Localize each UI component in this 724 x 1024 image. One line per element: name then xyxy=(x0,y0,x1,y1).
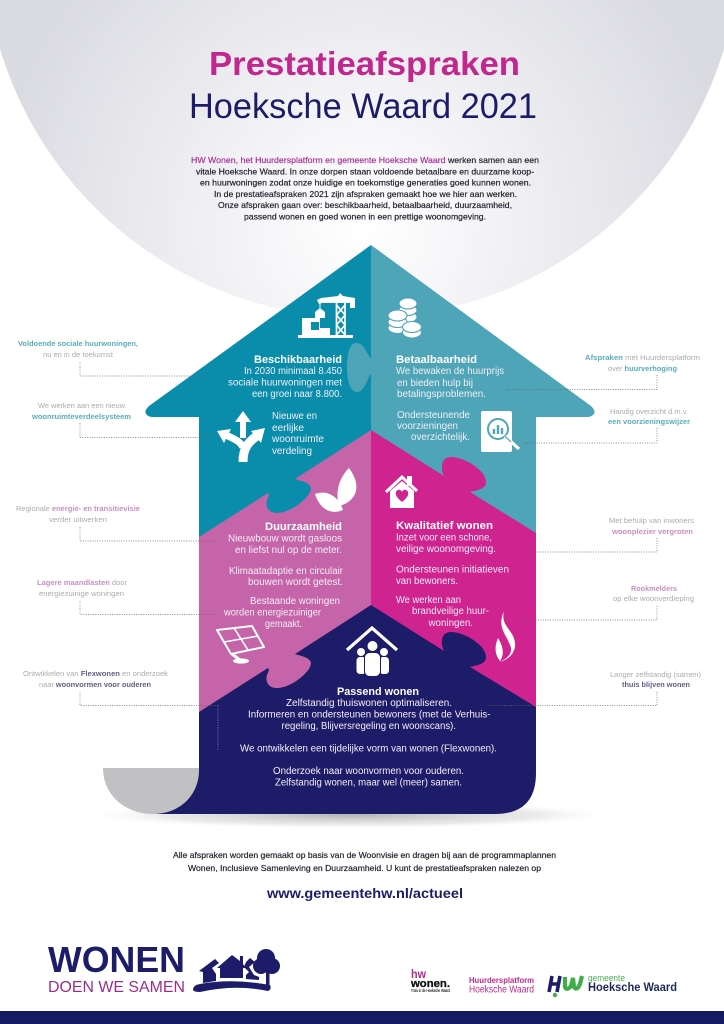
text: Betaalbaarheid: betalingsproblemen. xyxy=(397,389,486,400)
callout: woonruimteverdeelsysteem: woonruimteverdeelsysteem xyxy=(31,412,131,421)
icon: family under roof xyxy=(347,628,397,676)
text: voorzieningen: overzichtelijk. xyxy=(411,432,470,443)
logo: Wonen doen we samen: WONEN xyxy=(48,939,185,980)
text: Kwalitatief wonen: woningen. xyxy=(428,618,473,629)
icon: document with magnifier xyxy=(481,411,519,452)
text: Betaalbaarheid xyxy=(396,366,504,400)
title: Prestatieafspraken xyxy=(209,45,520,82)
text: Kwalitatief wonen: brandveilige huur- xyxy=(412,606,489,617)
text: Betaalbaarheid: en bieden hulp bij xyxy=(397,378,473,389)
callout: Flexwonen xyxy=(23,669,218,750)
heading: Betaalbaarheid: Betaalbaarheid xyxy=(396,354,477,366)
text: Passend wonen: Zelfstandig wonen, maar wel (meer) samen. xyxy=(275,778,462,789)
callout: Flexwonen: naar woonvormen voor ouderen xyxy=(39,680,151,689)
heading: Kwalitatief wonen: Kwalitatief wonen xyxy=(396,520,493,532)
footer bar xyxy=(0,1011,724,1024)
callout: woonplezier: Met behulp van inwoners xyxy=(609,516,694,525)
text: Passend wonen: Informeren en ondersteunen bewoners (met de Verhuis- xyxy=(248,710,490,721)
logo: Huurdersplatform: Hoeksche Waard xyxy=(469,984,534,996)
paper curl xyxy=(103,768,199,814)
text: Duurzaamheid: worden energiezuiniger xyxy=(223,608,322,619)
callout: huurverhoging xyxy=(507,353,700,390)
text: Kwalitatief wonen: Ondersteunen initiatieven xyxy=(396,565,509,576)
intro text block: en huurwoningen zodat onze huidige en toekomstige generaties goed kunnen wonen. xyxy=(200,178,531,188)
callout: thuis blijven wonen: Langer zelfstandig (samen) xyxy=(610,670,701,679)
callout: voorzieningswijzer xyxy=(524,407,690,443)
house shadow xyxy=(80,801,620,829)
callout: sociale huurwoningen: nu en in de toekomst xyxy=(43,350,113,359)
icon: arrows xyxy=(217,411,265,462)
intro text block: In de prestatieafspraken 2021 zijn afspraken gemaakt hoe we hier aan werken. xyxy=(214,189,517,199)
panel: Kwalitatief wonen xyxy=(371,430,536,730)
panel: Passend wonen xyxy=(153,605,536,814)
callout: huurverhoging: Afspraken met Huurdersplatform xyxy=(585,353,700,362)
text: Passend wonen xyxy=(240,698,497,789)
heading: Beschikbaarheid: Beschikbaarheid xyxy=(254,354,342,366)
text: Duurzaamheid: gemaakt. xyxy=(265,619,302,630)
intro text block xyxy=(191,155,539,222)
logo: Wonen doen we samen: DOEN WE SAMEN xyxy=(48,979,185,996)
panel: Beschikbaarheid xyxy=(145,245,371,545)
logo: Huurdersplatform: Huurdersplatform xyxy=(469,975,534,985)
intro text block: Onze afspraken gaan over: beschikbaarheid, betaalbaarheid, duurzaamheid, xyxy=(218,200,512,210)
icon: house with heart xyxy=(386,476,417,508)
text: Beschikbaarheid: een groei naar 8.800. xyxy=(252,389,342,400)
text: woonruimte verdeling xyxy=(271,411,324,457)
logo: HW Wonen: hw xyxy=(411,967,427,981)
text: Duurzaamheid: en liefst nul op de meter. xyxy=(235,545,342,556)
text: Beschikbaarheid xyxy=(228,366,342,400)
callout: woonruimteverdeelsysteem xyxy=(31,401,213,438)
text: voorzieningen: Ondersteunende xyxy=(397,410,470,421)
icon: coins xyxy=(388,298,422,338)
callout: woonplezier xyxy=(520,516,694,552)
title: Hoeksche Waard 2021 xyxy=(189,87,537,126)
icon: leaves xyxy=(315,468,356,512)
callout: energie- en transitievisie: verder uitwerken xyxy=(49,515,107,524)
closing text xyxy=(173,850,556,873)
intro text block: vitale Hoeksche Waard. In onze dorpen staan voldoende betaalbare en duurzame koop- xyxy=(196,166,534,176)
icon: solar panel xyxy=(217,626,264,664)
background: grey circle xyxy=(0,0,724,318)
logo: HW Wonen xyxy=(410,967,450,993)
text: Duurzaamheid: Bestaande woningen xyxy=(250,596,340,607)
text: voorzieningen xyxy=(397,410,470,443)
text: Passend wonen: We ontwikkelen een tijdelijke vorm van wonen (Flexwonen). xyxy=(240,744,497,755)
callout: lagere maandlasten xyxy=(37,578,214,614)
logo: HW Wonen: Trots in de Hoeksche Waard xyxy=(411,988,450,993)
callout: rookmelders: Rookmelders xyxy=(631,584,677,593)
logo: gemeente Hoeksche Waard: Hoeksche Waard xyxy=(588,980,677,994)
logo: Wonen doen we samen xyxy=(48,939,280,996)
heading: Passend wonen: Passend wonen xyxy=(337,686,419,698)
callout: woonplezier: woonplezier vergroten xyxy=(611,527,693,536)
panel: Duurzaamheid xyxy=(199,430,371,730)
callout: Flexwonen: Ontwikkelen van Flexwonen en onderzoek xyxy=(23,669,168,678)
callout: rookmelders: op elke woonverdieping xyxy=(613,594,694,603)
text: Duurzaamheid: Klimaatadaptie en circulair xyxy=(229,566,344,577)
callout: thuis blijven wonen: thuis blijven wonen xyxy=(622,680,690,689)
closing text: Wonen, Inclusieve Samenleving en Duurzaamheid. U kunt de prestatieafspraken nalezen op xyxy=(188,863,541,873)
text: Duurzaamheid: Nieuwbouw wordt gasloos xyxy=(228,534,342,545)
logo: HW Wonen: wonen. xyxy=(410,978,450,990)
callout: thuis blijven wonen xyxy=(488,670,701,706)
callout: woonruimteverdeelsysteem: We werken aan een nieuw xyxy=(38,401,126,410)
text: Kwalitatief wonen: We werken aan xyxy=(396,595,461,606)
text: Beschikbaarheid: In 2030 minimaal 8.450 xyxy=(244,366,342,377)
callout: rookmelders xyxy=(520,584,694,620)
callout: energie- en transitievisie xyxy=(16,504,214,541)
text: Betaalbaarheid: We bewaken de huurprijs xyxy=(396,366,504,377)
text: Kwalitatief wonen xyxy=(396,533,509,629)
text: woonruimte verdeling: woonruimte xyxy=(271,434,324,445)
text: woonruimte verdeling: eerlijke xyxy=(272,423,304,434)
icon: flame xyxy=(496,611,515,662)
callout: sociale huurwoningen: Voldoende sociale huurwoningen, xyxy=(18,339,138,348)
intro text block: passend wonen en goed wonen in een prettige woonomgeving. xyxy=(244,212,486,222)
callout: huurverhoging: over huurverhoging xyxy=(608,364,677,373)
text: woonruimte verdeling: verdeling xyxy=(272,446,312,457)
callout: voorzieningswijzer: Handig overzicht d.m.v. xyxy=(610,407,688,416)
callout: lagere maandlasten: Lagere maandlasten door xyxy=(37,578,128,587)
closing text: Alle afspraken worden gemaakt op basis van de Woonvisie en dragen bij aan de programmaplannen xyxy=(173,850,556,860)
text: Kwalitatief wonen: veilige woonomgeving. xyxy=(396,544,496,555)
text: Passend wonen: Zelfstandig thuiswonen optimaliseren. xyxy=(286,698,452,709)
callout: energie- en transitievisie: Regionale energie- en transitievisie xyxy=(16,504,140,513)
heading: Duurzaamheid: Duurzaamheid xyxy=(265,521,342,533)
text: Beschikbaarheid: sociale huurwoningen met xyxy=(228,378,342,389)
text: Kwalitatief wonen: van bewoners. xyxy=(396,576,458,587)
logo: gemeente Hoeksche Waard: gemeente xyxy=(588,973,625,983)
intro text block: HW Wonen, het Huurdersplatform en gemeente Hoeksche Waard werken samen aan een xyxy=(191,155,539,165)
text: Duurzaamheid: bouwen wordt getest. xyxy=(248,577,343,588)
title xyxy=(189,45,537,126)
text: Passend wonen: regeling, Blijversregeling en woonscans). xyxy=(282,721,456,732)
text: Duurzaamheid xyxy=(223,534,344,630)
text: voorzieningen: voorzieningen xyxy=(397,421,458,432)
callout: lagere maandlasten: energiezuinige woningen xyxy=(39,589,124,598)
callout: sociale huurwoningen xyxy=(18,339,213,376)
text: woonruimte verdeling: Nieuwe en xyxy=(272,411,317,422)
logo: Huurdersplatform xyxy=(469,975,534,996)
text: Kwalitatief wonen: Inzet voor een schone, xyxy=(396,533,492,544)
text: Passend wonen: Onderzoek naar woonvormen voor ouderen. xyxy=(273,766,464,777)
website link: www.gemeentehw.nl/actueel xyxy=(266,885,463,901)
logo: gemeente Hoeksche Waard xyxy=(549,973,677,997)
icon: crane xyxy=(298,293,355,338)
callout: voorzieningswijzer: een voorzieningswijzer xyxy=(608,417,690,426)
panel: Betaalbaarheid xyxy=(347,245,595,545)
